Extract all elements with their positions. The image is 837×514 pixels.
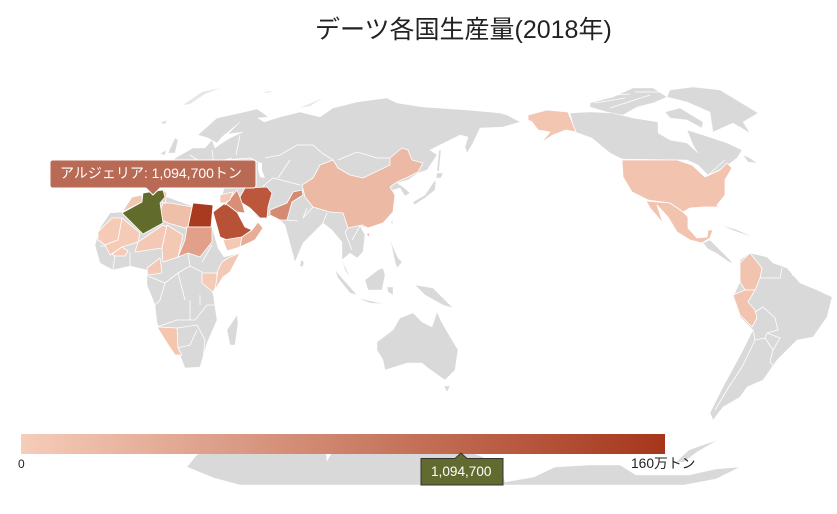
country: Sudan [178,227,212,257]
borders: North America [708,160,725,175]
borders: Africa [100,245,216,360]
country: Saudi Arabia [213,203,252,240]
country: Niger [135,225,167,252]
landmass: Canada [570,112,742,175]
legend value marker [421,453,503,485]
landmass: British Isles and Iceland [160,120,178,155]
country: Chad [162,225,183,262]
country: Oman and UAE [240,222,263,247]
country: Algeria [122,190,165,234]
country: Kenya [202,273,217,292]
country: Mali [105,218,140,255]
landmass: South America [710,253,832,420]
landmass: Greenland [667,87,758,133]
legend max label: 160万トン [631,456,695,471]
legend value marker: 1,094,700 [431,464,492,479]
country: Libya [158,203,192,228]
landmass: Japan and Sakhalin [413,150,443,205]
map tooltip: アルジェリア: 1,094,700トン [60,165,242,181]
map tooltip [50,160,256,195]
country: Morocco [122,195,142,212]
country: Pakistan [270,190,303,220]
landmass: Arctic islands [590,88,667,115]
landmass: Madagascar [227,315,238,345]
country: Cameroon [147,258,162,275]
landmass: Baffin Island [665,108,703,128]
landmass: Central America and Caribbean [703,225,753,263]
country: Mauritania [98,218,122,245]
country: Iraq [225,190,245,213]
country: Alaska [528,110,576,143]
legend min label: 0 [18,457,25,471]
country: China [302,148,423,237]
legend colour bar [21,434,665,454]
sea: Caspian [258,162,265,178]
country: Tunisia [162,190,167,203]
country: Mexico [646,201,713,243]
country: Namibia [157,327,182,355]
country: Iran [240,187,272,218]
landmass: Africa [95,190,240,368]
landmass: Arctic archipelagos [183,88,323,108]
country: Yemen [223,237,242,251]
borders: South America [715,268,795,410]
borders: Arctic channels [595,92,660,108]
country: Jordan and Syria [220,192,233,203]
landmass: Australia [377,312,458,392]
country: Somalia [215,253,240,290]
world map [95,87,832,485]
landmass: Antarctica [187,440,740,485]
landmass: New Guinea [415,285,453,308]
landmass: Eurasia [150,98,520,278]
country: United States [622,160,732,218]
landmass: Newfoundland [743,155,757,163]
country: Burkina Faso [112,247,128,256]
country: Colombia [740,253,762,290]
country: Egypt [188,203,213,227]
borders: Asia and Europe [190,135,390,250]
landmass: Southeast Asian islands [300,221,402,304]
title: デーツ各国生産量(2018年) [315,16,612,44]
country: Peru [733,290,757,327]
